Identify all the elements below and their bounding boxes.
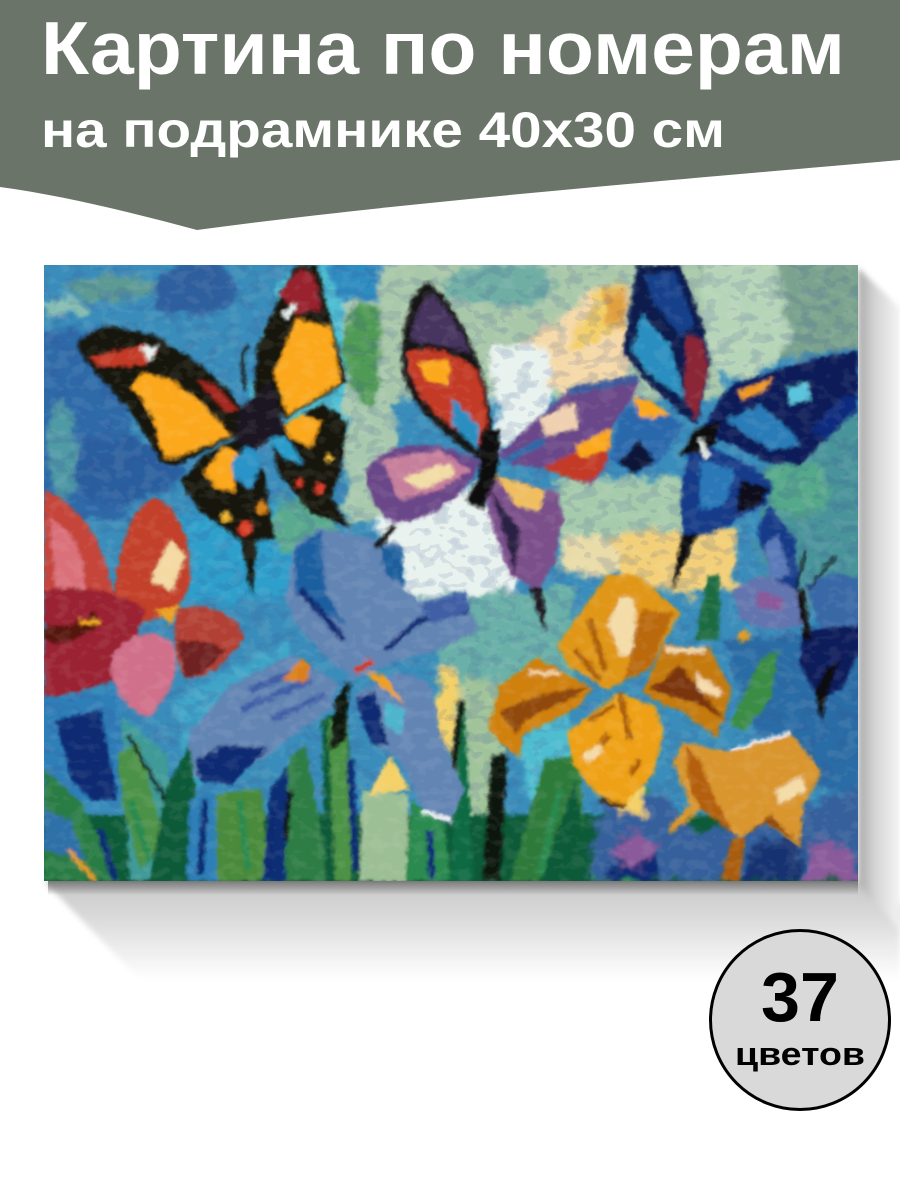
mottled paint texture [44, 265, 858, 815]
iris: red [44, 490, 244, 718]
iris: blue [187, 528, 478, 825]
butterfly 2: multicolour centre [367, 283, 640, 635]
header banner [0, 0, 900, 230]
badge: 37 colours: цветов [735, 1036, 865, 1072]
canvas drop shadow [44, 268, 900, 980]
iris: orange [488, 575, 822, 881]
butterfly 3: dark blue [610, 265, 858, 590]
butterfly 1: orange [79, 265, 351, 597]
badge: 37 colours: 37 [761, 958, 839, 1036]
badge: 37 colours [710, 930, 890, 1110]
painting background colour patches [44, 265, 858, 818]
subtitle: на подрамнике 40х30 см [41, 102, 725, 158]
lower right blue flower [590, 785, 866, 881]
light paint highlights [44, 265, 858, 881]
painting: butterflies and irises [30, 258, 870, 890]
butterfly 4: small right [733, 505, 860, 722]
grass and leaves [30, 575, 870, 890]
title: Картина по номерам [41, 6, 845, 90]
